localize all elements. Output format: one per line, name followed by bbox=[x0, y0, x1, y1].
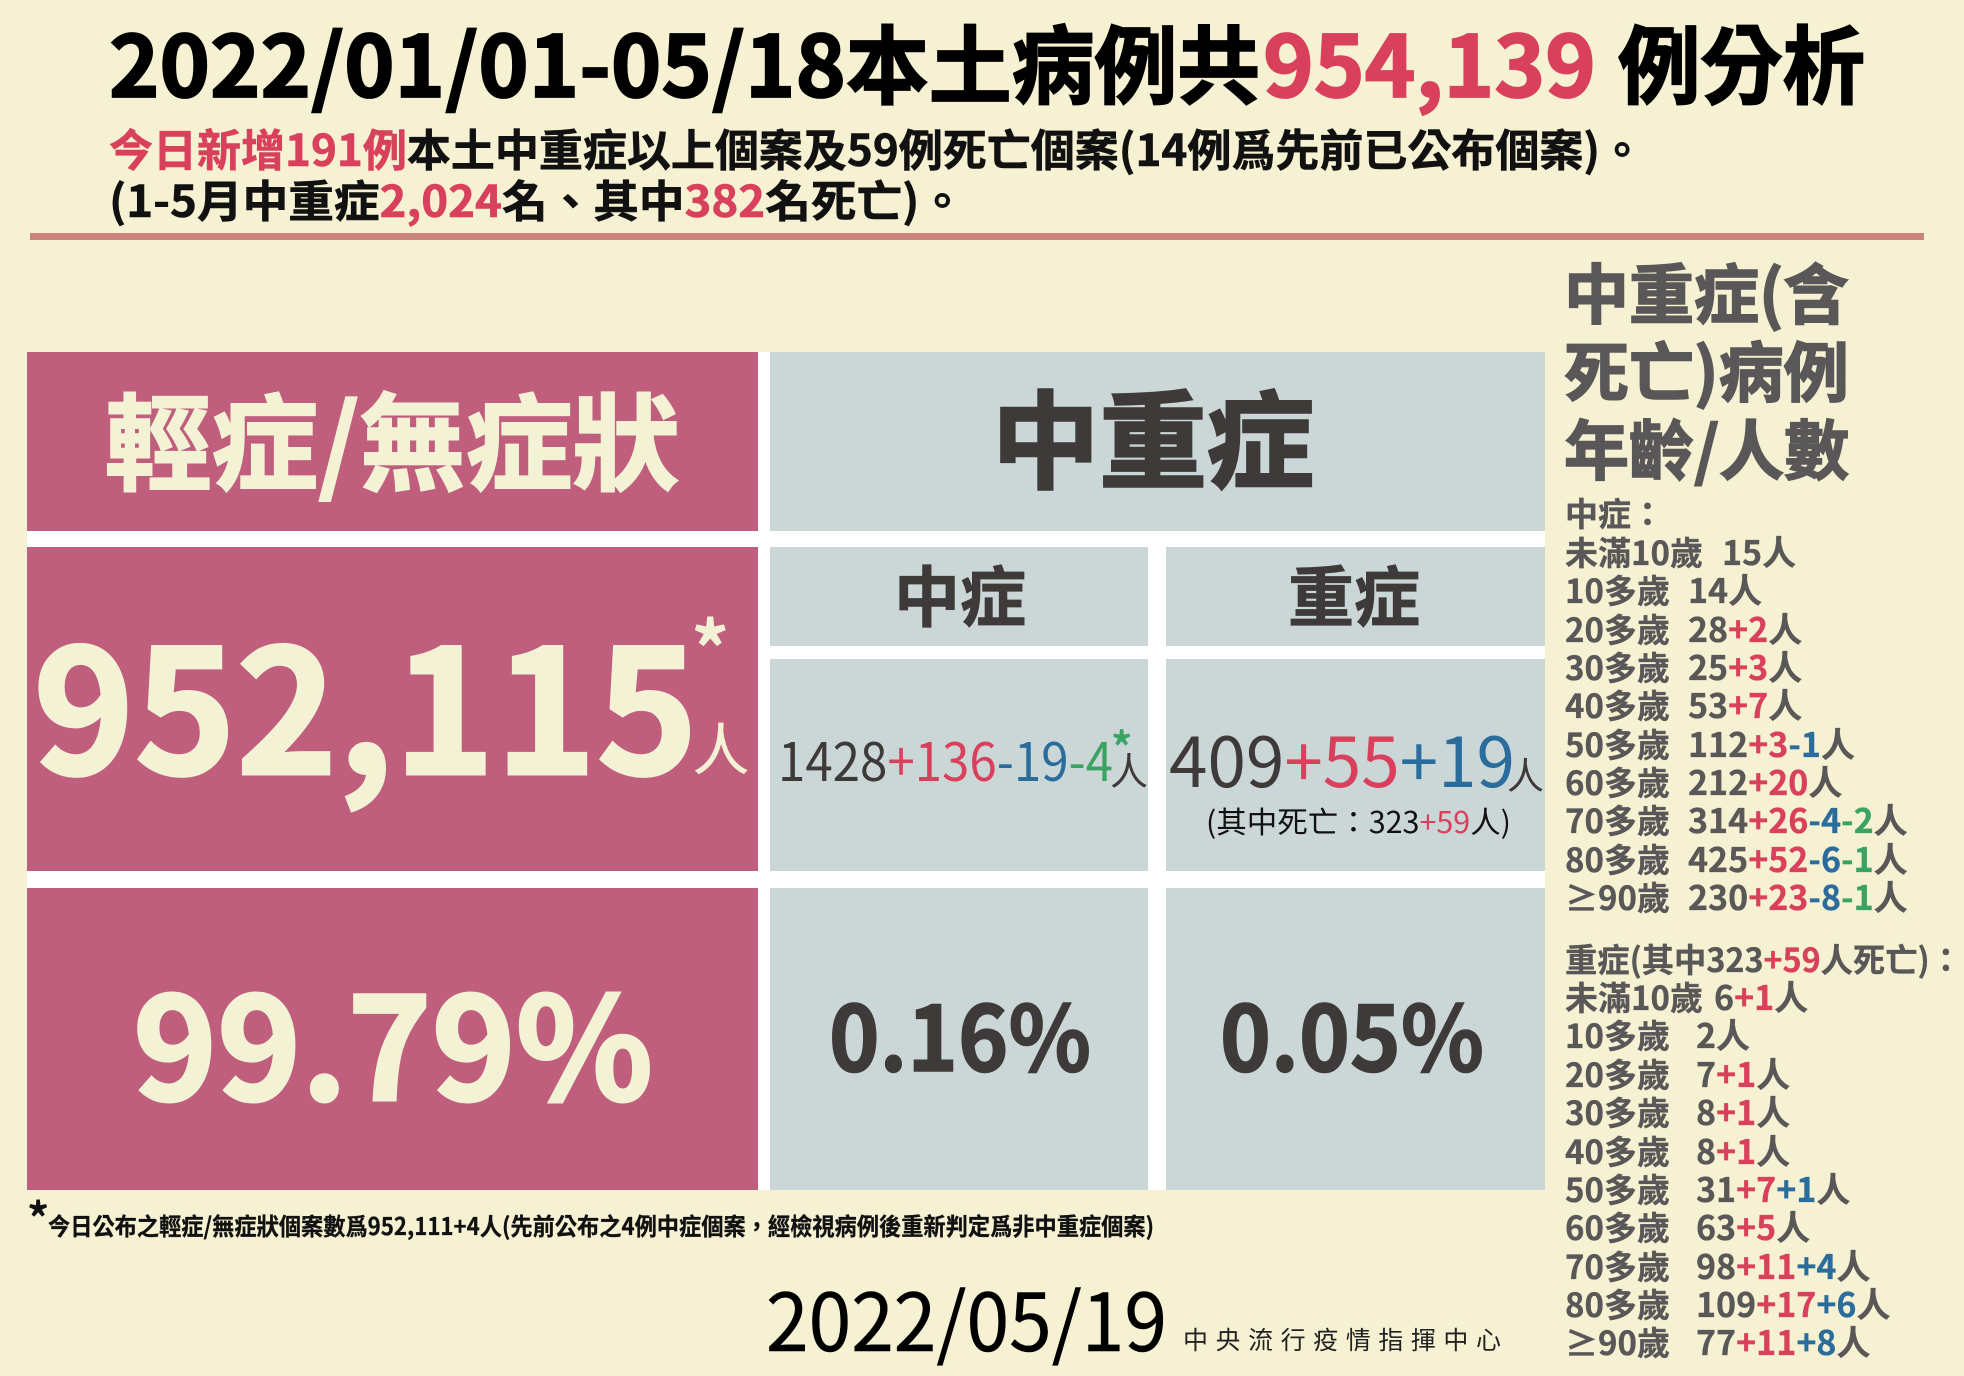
list: severe cases by age: 6+1人 bbox=[1714, 971, 1808, 1020]
footnote: 今日公布之輕症/無症狀個案數爲952,111+4人(先前公布之4例中症個案，經檢視病例後重新判定爲非中重症個案) bbox=[48, 1207, 1154, 1242]
moderate case count: 人 bbox=[1110, 741, 1148, 796]
heading: moderate: 中症 bbox=[894, 545, 1026, 641]
sidebar heading: 中重症(含 bbox=[1564, 243, 1849, 337]
list: severe cases by age: 31+7+1人 bbox=[1696, 1163, 1850, 1212]
heading: severe: 重症 bbox=[1288, 545, 1420, 641]
list: severe cases by age: 重症(其中323+59人死亡)： bbox=[1565, 934, 1962, 982]
list: severe cases by age: 50多歲 bbox=[1565, 1164, 1670, 1212]
list: moderate cases by age: 60多歲 bbox=[1565, 757, 1670, 805]
list: moderate cases by age: 314+26-4-2人 bbox=[1688, 794, 1908, 843]
list: severe cases by age: 7+1人 bbox=[1696, 1048, 1790, 1097]
list: severe cases by age: 未滿10歲 bbox=[1565, 972, 1703, 1020]
title bbox=[109, 0, 1865, 122]
list: severe cases by age: 60多歲 bbox=[1565, 1202, 1670, 1250]
list: severe cases by age: 109+17+6人 bbox=[1696, 1278, 1890, 1327]
title: 例分析 bbox=[1618, 0, 1865, 122]
list: moderate cases by age: 53+7人 bbox=[1688, 679, 1802, 728]
list: severe cases by age: 30多歲 bbox=[1565, 1087, 1670, 1135]
heading: moderate to severe: 中重症 bbox=[992, 357, 1314, 511]
list: moderate cases by age: 30多歲 bbox=[1565, 642, 1670, 690]
subtitle text: 今日新增191例本土中重症以上個案及59例死亡個案(14例爲先前已公布個案)。 bbox=[109, 115, 1644, 179]
list: moderate cases by age: 10多歲 bbox=[1565, 565, 1670, 613]
list: severe cases by age: 80多歲 bbox=[1565, 1279, 1670, 1327]
list: moderate cases by age: 50多歲 bbox=[1565, 719, 1670, 767]
panel: mild or asymptomatic column bbox=[27, 352, 758, 1190]
footnote: * bbox=[27, 1184, 49, 1248]
sidebar heading bbox=[1564, 243, 1849, 493]
list: severe cases by age: 10多歲 bbox=[1565, 1010, 1670, 1058]
list: severe cases by age: 20多歲 bbox=[1565, 1049, 1670, 1097]
list: severe cases by age: 2人 bbox=[1696, 1009, 1750, 1058]
severe case count: 人 bbox=[1507, 746, 1544, 800]
list: severe cases by age: 40多歲 bbox=[1565, 1126, 1670, 1174]
list: moderate cases by age: 70多歲 bbox=[1565, 795, 1670, 843]
sidebar heading: 死亡)病例 bbox=[1564, 321, 1849, 415]
list: moderate cases by age: 20多歲 bbox=[1565, 604, 1670, 652]
subtitle text: (1-5月中重症2,024名、其中382名死亡)。 bbox=[109, 166, 965, 230]
list: moderate cases by age bbox=[1565, 488, 1908, 920]
list: moderate cases by age: 14人 bbox=[1688, 564, 1762, 613]
list: severe cases by age bbox=[1565, 934, 1962, 1365]
list: moderate cases by age: 中症： bbox=[1565, 488, 1664, 536]
sidebar heading: 年齡/人數 bbox=[1564, 399, 1849, 493]
moderate percentage: 0.16% bbox=[829, 967, 1091, 1097]
subtitle text bbox=[109, 115, 1644, 230]
mild percentage: 99.79% bbox=[133, 935, 653, 1141]
issuing agency: 中央流行疫情指揮中心 bbox=[1183, 1321, 1501, 1357]
moderate case count: * bbox=[1111, 715, 1132, 776]
severe deaths note: (其中死亡：323+59人) bbox=[1206, 798, 1511, 842]
list: moderate cases by age: 40多歲 bbox=[1565, 680, 1670, 728]
list: severe cases by age: 70多歲 bbox=[1565, 1241, 1670, 1289]
list: severe cases by age: 98+11+4人 bbox=[1696, 1240, 1870, 1289]
mild case count: 人 bbox=[693, 706, 749, 787]
list: severe cases by age: 8+1人 bbox=[1696, 1086, 1790, 1135]
list: moderate cases by age: 15人 bbox=[1722, 526, 1796, 575]
list: severe cases by age: ≥90歲 bbox=[1565, 1317, 1670, 1365]
list: moderate cases by age: 25+3人 bbox=[1688, 641, 1802, 690]
panel: moderate and severe columns bbox=[770, 352, 1545, 1190]
list: moderate cases by age: 425+52-6-1人 bbox=[1688, 833, 1908, 882]
title: 954,139 bbox=[1263, 0, 1596, 122]
title: 本土病例共 bbox=[846, 0, 1260, 122]
list: moderate cases by age: 112+3-1人 bbox=[1688, 718, 1855, 767]
date: 2022/05/19 bbox=[766, 1259, 1167, 1375]
list: severe cases by age: 63+5人 bbox=[1696, 1201, 1810, 1250]
list: severe cases by age: 77+11+8人 bbox=[1696, 1316, 1870, 1365]
list: moderate cases by age: ≥90歲 bbox=[1565, 872, 1670, 920]
list: moderate cases by age: 230+23-8-1人 bbox=[1688, 871, 1908, 920]
list: moderate cases by age: 212+20人 bbox=[1688, 756, 1842, 805]
footnote bbox=[27, 1184, 1154, 1248]
moderate case count: 1428+136-19-4 bbox=[778, 721, 1113, 797]
list: moderate cases by age: 28+2人 bbox=[1688, 603, 1802, 652]
list: moderate cases by age: 未滿10歲 bbox=[1565, 527, 1703, 575]
mild case count: 952,115 bbox=[33, 574, 698, 824]
mild case count: * bbox=[691, 590, 730, 700]
severe percentage: 0.05% bbox=[1220, 967, 1484, 1097]
severe case count: 409+55+19 bbox=[1169, 707, 1515, 807]
list: moderate cases by age: 80多歲 bbox=[1565, 834, 1670, 882]
list: severe cases by age: 8+1人 bbox=[1696, 1125, 1790, 1174]
title: 2022/01/01-05/18 bbox=[109, 0, 846, 122]
heading: mild or asymptomatic: 輕症/無症狀 bbox=[105, 361, 679, 513]
